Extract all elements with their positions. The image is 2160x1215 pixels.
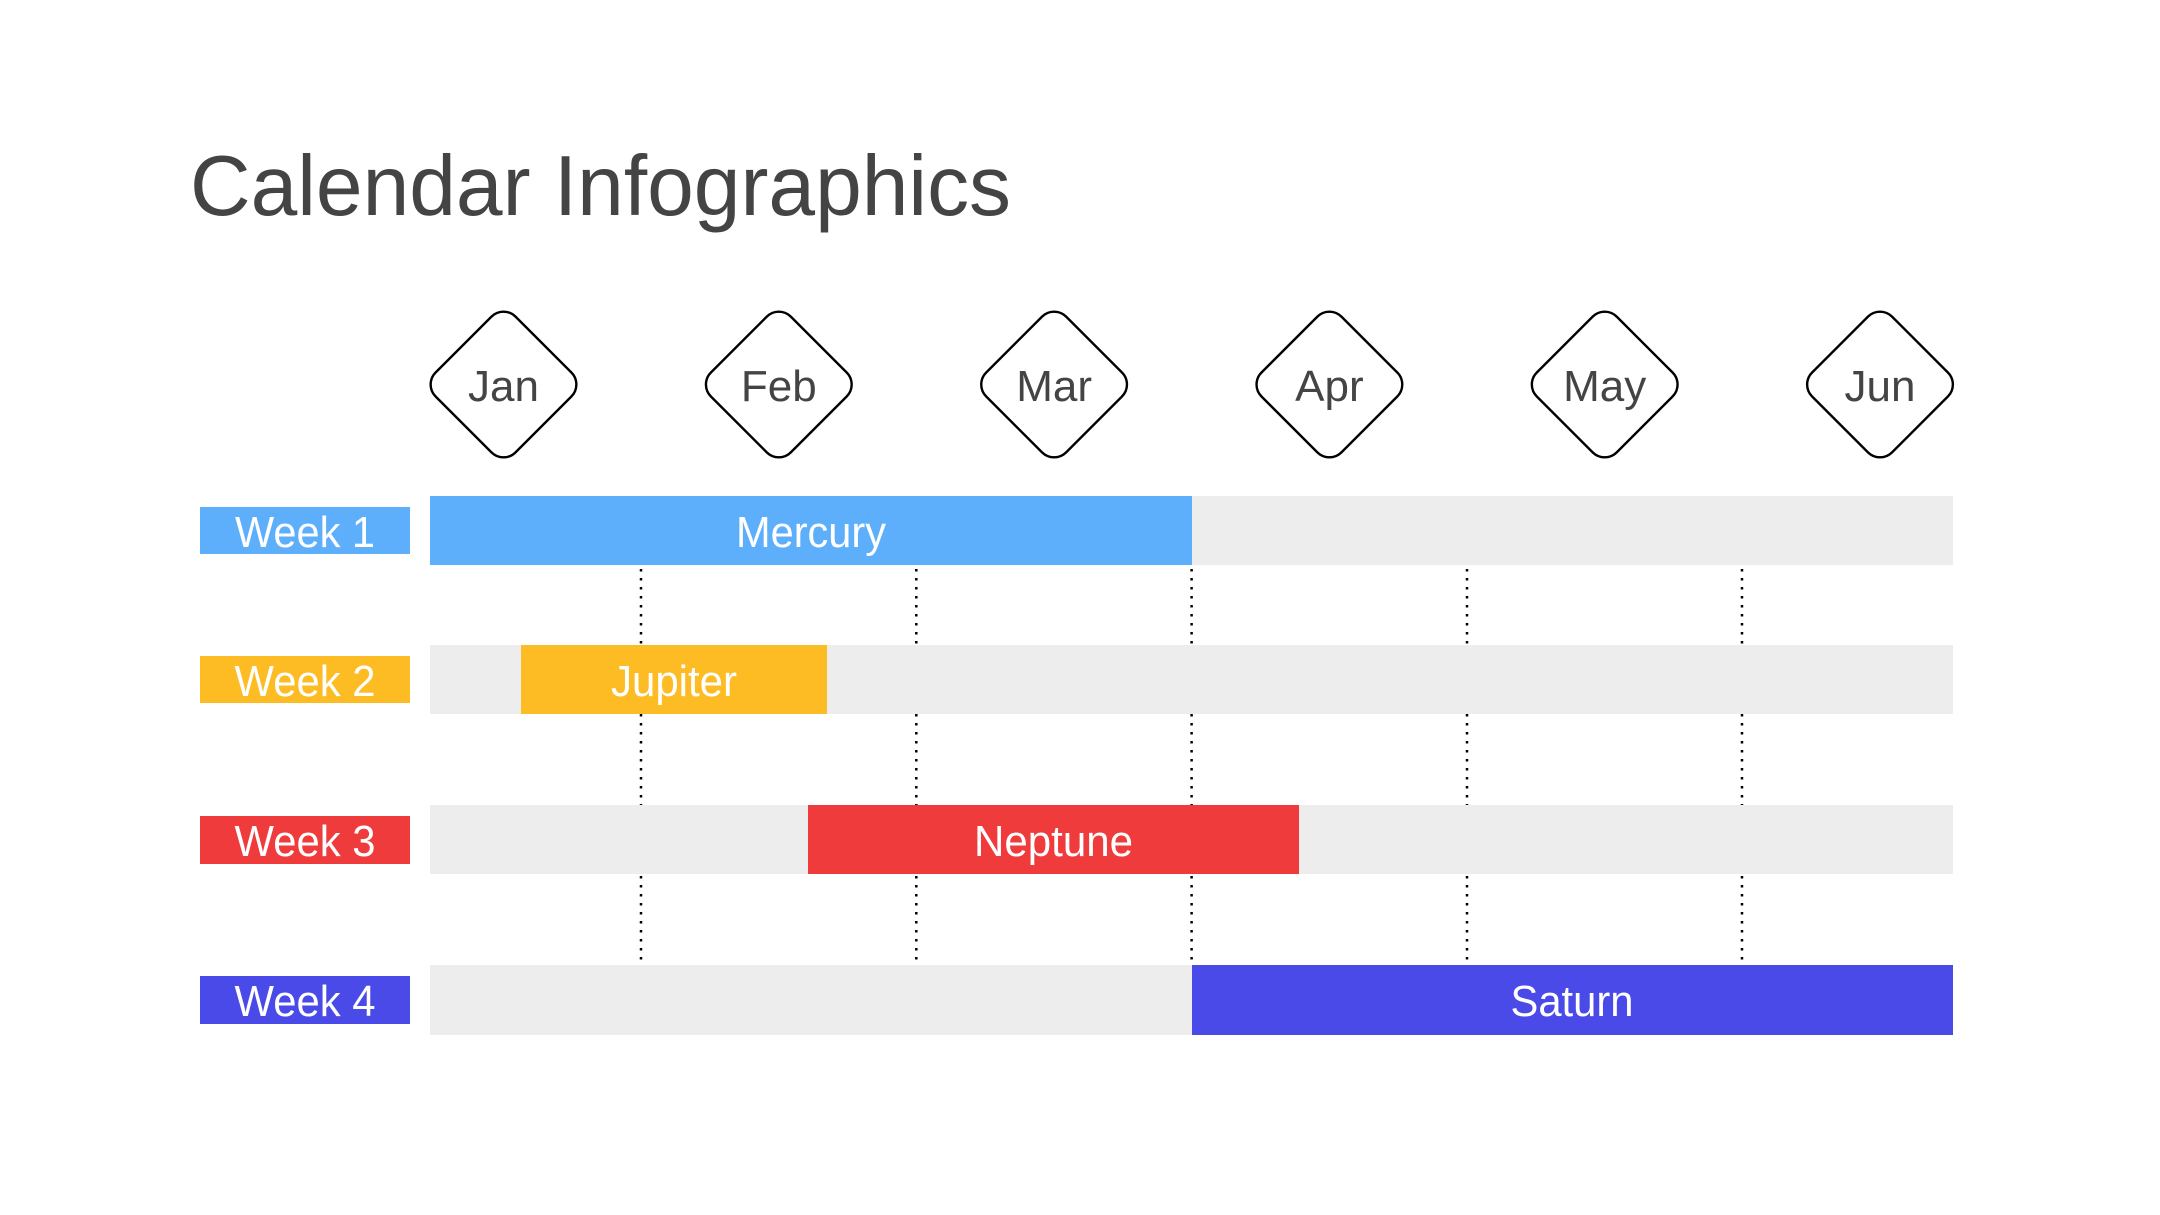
month: Jun: Jun [1845, 362, 1915, 411]
bar: Jupiter [521, 645, 827, 714]
month: Feb [699, 305, 859, 464]
title: Calendar Infographics [190, 139, 1011, 234]
label: Week 2 [200, 656, 410, 706]
month: Mar: Mar [1016, 362, 1092, 411]
bar: Saturn [1192, 965, 1953, 1035]
label: Week 4 [200, 976, 410, 1026]
month: Jan [424, 305, 583, 464]
label: Week 3: Week 3 [234, 817, 376, 866]
bar: Mercury: Mercury [736, 508, 886, 557]
bar: Jupiter: Jupiter [611, 657, 737, 706]
bar: Saturn: Saturn [1510, 977, 1634, 1026]
month: Apr: Apr [1295, 362, 1364, 411]
bar: Neptune: Neptune [974, 817, 1133, 866]
month: Mar [974, 305, 1134, 464]
month: Apr [1249, 305, 1409, 464]
bar: Neptune [808, 805, 1299, 874]
month diamonds [424, 305, 1960, 464]
row: Week 2 [200, 645, 1953, 714]
label: Week 2: Week 2 [234, 657, 376, 706]
month: Feb: Feb [741, 362, 817, 411]
track: Week 3 [430, 805, 1953, 874]
month: May [1525, 305, 1685, 464]
row: Week 4 [200, 965, 1953, 1035]
label: Week 1: Week 1 [235, 508, 375, 557]
month: May: May [1563, 362, 1646, 411]
month: Jan: Jan [468, 362, 539, 411]
label: Week 1 [200, 507, 410, 557]
label: Week 4: Week 4 [234, 977, 376, 1026]
row: Week 3 [200, 805, 1953, 874]
bar: Mercury [430, 496, 1192, 565]
track: Week 1 [430, 496, 1953, 565]
row: Week 1 [200, 496, 1953, 565]
month: Jun [1800, 305, 1960, 464]
track: Week 4 [430, 965, 1953, 1035]
label: Week 3 [200, 816, 410, 866]
track: Week 2 [430, 645, 1953, 714]
